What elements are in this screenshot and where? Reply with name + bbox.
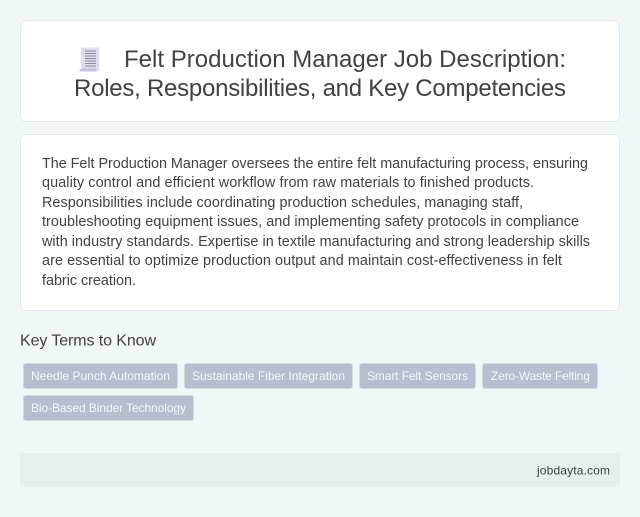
tag: zero-waste felting (482, 364, 598, 388)
panel: description card (20, 134, 620, 310)
tag: needle punch automation: Needle Punch Automation (31, 369, 170, 383)
panel: title card (20, 20, 620, 122)
description text (41, 156, 590, 289)
icon: document scroll (80, 48, 101, 72)
description text: quality control and efficient workflow from raw materials to finished products. (42, 175, 534, 191)
footer site name: jobdayta.com (536, 464, 610, 478)
heading: key terms: Key Terms to Know (20, 332, 156, 350)
title line 1: Felt Production Manager Job Description: (124, 46, 566, 73)
tag: bio-based binder technology: Bio-Based Binder Technology (31, 401, 186, 415)
tag: zero-waste felting: Zero-Waste Felting (491, 369, 590, 383)
footer (20, 453, 620, 487)
tag: smart felt sensors (360, 364, 476, 388)
description text: troubleshooting equipment issues, and implementing safety protocols in compliance (42, 214, 579, 230)
tag list (24, 364, 598, 420)
title line 2: Roles, Responsibilities, and Key Competencies (74, 75, 566, 102)
tag: sustainable fiber integration (184, 364, 352, 388)
tag: sustainable fiber integration: Sustainable Fiber Integration (192, 369, 345, 383)
tag: needle punch automation (24, 364, 178, 388)
description text: The Felt Production Manager oversees the entire felt manufacturing process, ensuring (42, 156, 588, 172)
tag: smart felt sensors: Smart Felt Sensors (367, 369, 468, 383)
description text: fabric creation. (42, 273, 136, 289)
description text: with industry standards. Expertise in textile manufacturing and strong leadership skills (41, 234, 590, 250)
description text: are essential to optimize production output and maintain cost-effectiveness in felt (42, 253, 562, 269)
tag: bio-based binder technology (24, 396, 194, 420)
description text: Responsibilities include coordinating production schedules, managing staff, (42, 195, 523, 211)
